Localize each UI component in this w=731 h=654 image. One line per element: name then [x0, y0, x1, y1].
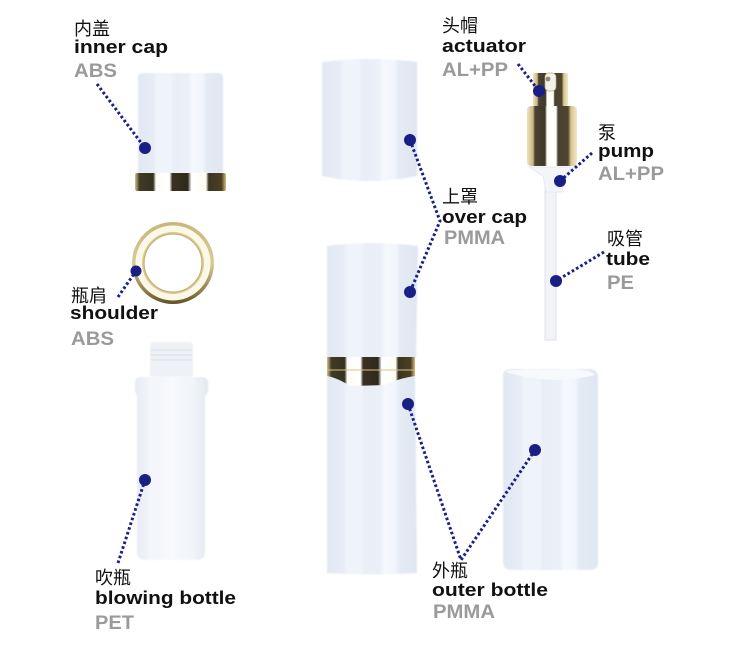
leader: outer bottle: [402, 398, 541, 560]
label: inner cap: inner cap: [74, 37, 168, 57]
part: shoulder ring: [132, 222, 214, 304]
label: outer bottle: outer bottle: [432, 580, 548, 600]
part: inner cap: [135, 73, 226, 191]
label: outer bottle: 外瓶: [432, 561, 468, 581]
label: over cap: 上罩: [442, 187, 478, 207]
leader: inner cap: [97, 84, 151, 154]
part: assembled bottle: [327, 243, 418, 574]
label: blowing bottle: PET: [95, 613, 134, 634]
leader: shoulder: [118, 266, 142, 297]
leader: blowing bottle: [118, 474, 151, 563]
label: blowing bottle: blowing bottle: [95, 588, 236, 608]
leader: tube: [550, 252, 604, 287]
label: outer bottle: PMMA: [433, 602, 495, 623]
label: tube: tube: [606, 249, 650, 269]
label: over cap: over cap: [442, 207, 527, 227]
label: pump: pump: [598, 141, 654, 161]
label: pump: AL+PP: [598, 164, 664, 185]
leader: pump: [554, 153, 592, 187]
part: actuator and pump: [527, 73, 577, 340]
label: actuator: [442, 16, 526, 81]
label: shoulder: [70, 286, 158, 350]
label: tube: 吸管: [607, 229, 643, 249]
label: pump: [598, 123, 664, 185]
label: inner cap: [74, 19, 168, 82]
leader: actuator: [518, 64, 545, 97]
label: pump: 泵: [598, 123, 616, 143]
label: outer bottle: [432, 561, 548, 623]
label: inner cap: 内盖: [74, 19, 110, 39]
label: shoulder: ABS: [71, 329, 114, 350]
label: inner cap: ABS: [74, 61, 117, 82]
label: actuator: AL+PP: [442, 60, 508, 81]
part: blowing bottle: [135, 342, 208, 560]
label: blowing bottle: 吹瓶: [95, 568, 131, 588]
label: shoulder: 瓶肩: [71, 286, 107, 306]
label: over cap: [442, 187, 527, 249]
label: shoulder: shoulder: [70, 303, 158, 323]
label: over cap: PMMA: [444, 228, 505, 249]
label: actuator: 头帽: [442, 16, 478, 36]
part: outer bottle sleeve: [503, 369, 598, 570]
label: actuator: actuator: [442, 36, 526, 56]
label: tube: [606, 229, 650, 294]
label: tube: PE: [607, 273, 634, 294]
leader: over cap: [404, 134, 440, 298]
label: blowing bottle: [95, 568, 236, 634]
part: over cap: [322, 59, 417, 181]
